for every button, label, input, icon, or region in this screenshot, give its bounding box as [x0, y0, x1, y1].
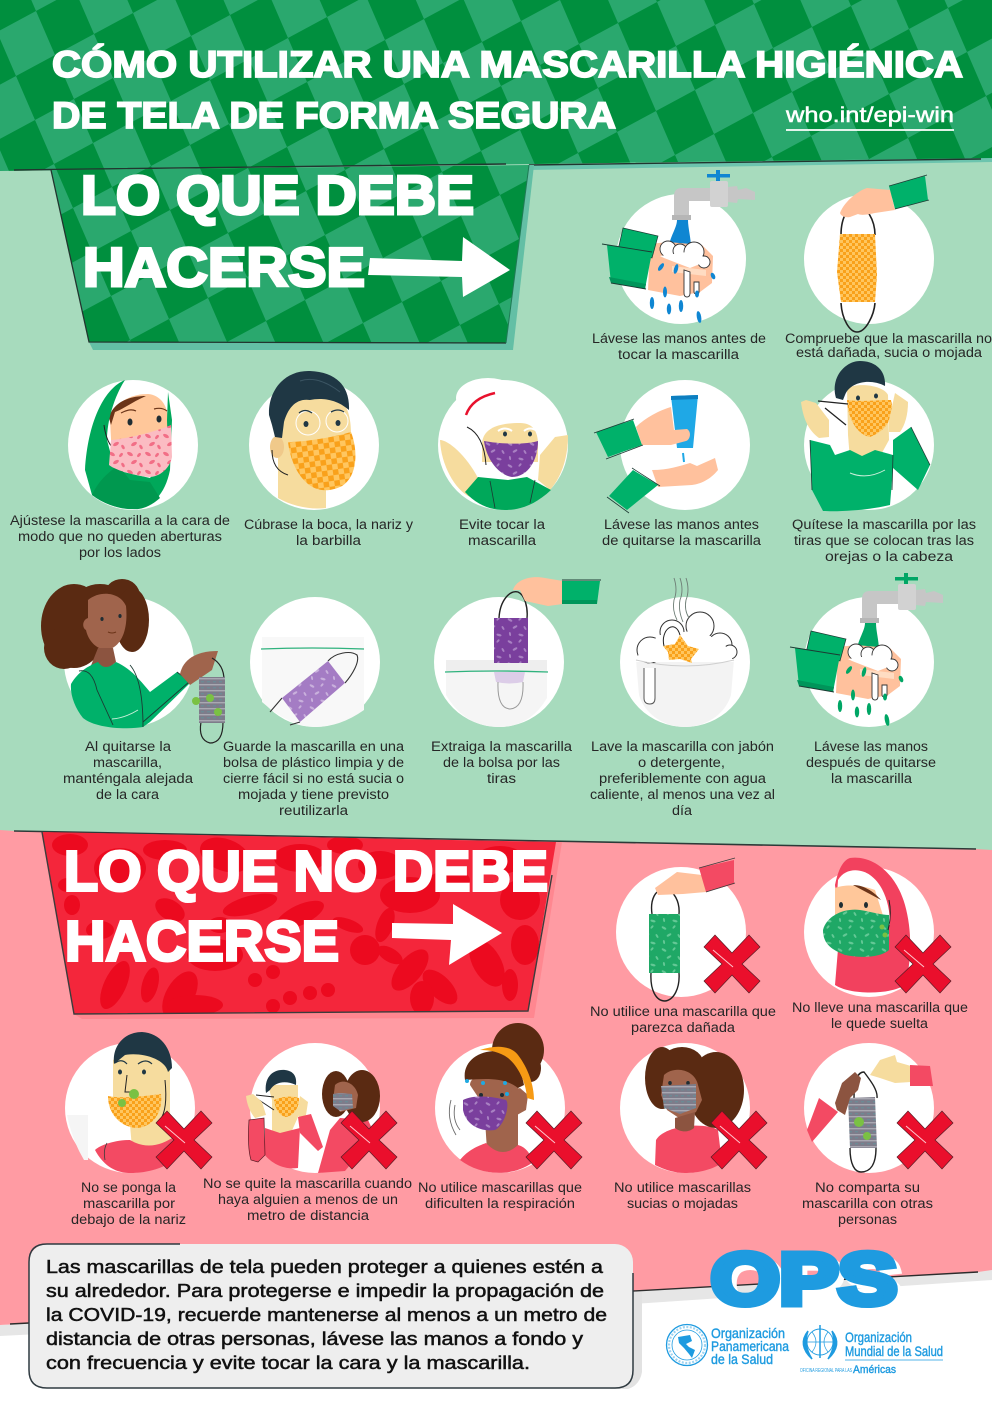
step: keep away from face [41, 579, 225, 802]
caption: de la cara [96, 787, 160, 802]
step: take from bag [431, 577, 601, 786]
callout: advice box: distancia de otras personas, lávese las manos a fondo y [46, 1329, 583, 1349]
caption: No comparta su [815, 1180, 920, 1195]
heading text: HACERSE [65, 910, 339, 974]
caption: personas [838, 1212, 897, 1227]
caption: parezca dañada [631, 1020, 736, 1035]
caption: mojada y tiene previsto [238, 787, 389, 802]
caption [223, 739, 405, 818]
icon: red cross [156, 1111, 212, 1169]
callout: advice box [29, 1244, 642, 1389]
caption: No utilice mascarillas [614, 1180, 751, 1195]
caption: metro de distancia [247, 1208, 370, 1223]
icon: mask in bowl with soap [636, 578, 737, 727]
caption [244, 517, 413, 548]
caption: modo que no queden aberturas [18, 529, 222, 544]
do not: remove near others [203, 1043, 412, 1223]
icon: red cross [704, 935, 760, 993]
heading panel: lo que no debe hacerse [40, 830, 562, 1025]
do not: share mask [802, 1043, 953, 1227]
caption: No se quite la mascarilla cuando [203, 1176, 412, 1191]
caption: No utilice una mascarilla que [590, 1004, 776, 1019]
caption: Cúbrase la boca, la nariz y [244, 517, 413, 532]
caption: caliente, al menos una vez al [590, 787, 775, 802]
logo text: Organización Mundial de la Salud, Américas: Organización [845, 1329, 912, 1345]
icon: man removing mask beside woman [246, 1070, 380, 1173]
caption: debajo de la nariz [71, 1212, 186, 1227]
caption: dificulten la respiración [425, 1196, 575, 1211]
icon: woman with loose mask [823, 858, 910, 992]
caption: tiras [487, 771, 516, 786]
heading text: LO QUE DEBE [81, 164, 474, 226]
heading text [81, 164, 474, 298]
pink section shadow [0, 1270, 992, 1336]
icon: washing hands, green water [790, 573, 943, 726]
do not: loose mask [792, 858, 968, 1031]
icon: red cross [897, 1111, 953, 1169]
panel: what to do background [0, 155, 992, 850]
logo text: Organización Panamericana de la Salud: de la Salud [711, 1351, 773, 1367]
callout: advice box: su alrededor. Para protegerse e impedir la propagación de [46, 1281, 604, 1301]
arrow [392, 904, 502, 965]
caption: No utilice mascarillas que [418, 1180, 582, 1195]
caption: mascarilla por [83, 1196, 176, 1211]
pink section bottom line [10, 1272, 978, 1324]
logo: WHO emblem [803, 1325, 837, 1359]
caption: de la bolsa por las [443, 755, 560, 770]
logo text: Organización Panamericana de la Salud: Organización [711, 1325, 785, 1341]
caption: está dañada, sucia o mojada [796, 345, 983, 360]
caption [63, 739, 194, 802]
caption: No se ponga la [81, 1180, 177, 1195]
caption [71, 1180, 186, 1227]
step: adjust mask [10, 380, 230, 560]
icon: man with orange mask [269, 371, 355, 509]
logo text: Organización Mundial de la Salud, Américas: Américas [853, 1364, 896, 1376]
step: wash mask [590, 578, 775, 818]
caption: día [672, 803, 693, 818]
caption [590, 739, 775, 818]
do not: hard to breathe [418, 1023, 582, 1211]
heading panel: lo que debe hacerse [51, 164, 534, 350]
caption: orejas o la cabeza [825, 549, 954, 564]
icon: sanitizer and hands [594, 395, 718, 513]
caption [590, 1004, 776, 1035]
caption: la barbilla [296, 533, 362, 548]
caption: reutilizarla [279, 803, 349, 818]
caption: manténgala alejada [63, 771, 194, 786]
website link: who.int/epi-win [785, 104, 954, 127]
title: DE TELA DE FORMA SEGURA [52, 95, 616, 136]
title: CÓMO UTILIZAR UNA MASCARILLA HIGIÉNICA [52, 43, 963, 85]
step: check mask [785, 175, 992, 360]
icon: older woman with purple mask [440, 378, 568, 510]
caption: mascarilla, [93, 755, 162, 770]
caption [459, 517, 546, 548]
caption [802, 1180, 933, 1227]
icon: woman struggling to breathe [449, 1023, 544, 1173]
caption [592, 331, 766, 362]
logo text: Organización Mundial de la Salud, Américas: Mundial de la Salud [845, 1343, 943, 1359]
icon: washing hands [602, 170, 755, 323]
icon: red cross [895, 935, 951, 993]
caption: No lleve una mascarilla que [792, 1000, 968, 1015]
caption: Lávese las manos antes [604, 517, 759, 532]
caption: Al quitarse la [85, 739, 172, 754]
caption: preferiblemente con agua [599, 771, 767, 786]
icon: woman holding contaminated mask [41, 579, 225, 743]
caption: tocar la mascarilla [618, 347, 740, 362]
icon: woman with dirty mask [645, 1047, 744, 1173]
icon: hand pulling mask from bag [445, 577, 601, 727]
caption: Compruebe que la mascarilla no [785, 331, 992, 346]
logo text: Organización Panamericana de la Salud [711, 1325, 789, 1367]
logo: OPS: OPS [716, 1245, 902, 1325]
caption [792, 517, 976, 564]
caption: tiras que se colocan tras las [794, 533, 974, 548]
heading text [64, 840, 548, 974]
icon: sharing a contaminated mask [807, 1055, 933, 1172]
header banner [0, 0, 992, 171]
logo text: Organización Panamericana de la Salud: Panamericana [711, 1338, 789, 1354]
caption [792, 1000, 968, 1031]
caption: Quítese la mascarilla por las [792, 517, 976, 532]
callout: advice box: con frecuencia y evite tocar la cara y la mascarilla. [46, 1353, 530, 1373]
arrow [368, 237, 510, 297]
do not: below nose [65, 1032, 212, 1227]
logo: OPS: OPS [711, 1240, 897, 1320]
caption: por los lados [79, 545, 161, 560]
caption: bolsa de plástico limpia y de [223, 755, 404, 770]
panel: what not to do background [0, 826, 992, 1325]
step: avoid touching [438, 378, 568, 548]
icon: woman with hijab and pink mask [85, 380, 172, 509]
caption [431, 739, 573, 786]
step: store in bag [223, 597, 405, 818]
caption: Lávese las manos antes de [592, 331, 766, 346]
caption: haya alguien a menos de un [218, 1192, 398, 1207]
caption: Guarde la mascarilla en una [223, 739, 405, 754]
caption: mascarilla [468, 533, 537, 548]
caption: de quitarse la mascarilla [602, 533, 762, 548]
icon: hand holding damaged mask [649, 858, 735, 1001]
heading text: HACERSE [83, 236, 365, 298]
icon: red cross [711, 1111, 767, 1169]
floral background [40, 830, 560, 1025]
icon: man with mask below nose [67, 1032, 178, 1173]
do not: damaged mask [590, 858, 776, 1035]
icon: hand holding mask [837, 175, 929, 332]
caption: cierre fácil si no está sucia o [223, 771, 404, 786]
caption: después de quitarse [806, 755, 936, 770]
caption [614, 1180, 751, 1211]
caption: Lávese las manos [814, 739, 928, 754]
caption [10, 513, 230, 560]
do not: dirty or wet [614, 1043, 767, 1211]
section divider line [14, 831, 976, 849]
title [52, 43, 963, 136]
step: wash hands after [790, 573, 943, 786]
caption: Ajústese la mascarilla a la cara de [10, 513, 230, 528]
caption: Lave la mascarilla con jabón [591, 739, 774, 754]
caption: Extraiga la mascarilla [431, 739, 573, 754]
caption: la mascarilla [831, 771, 913, 786]
heading text: LO QUE NO DEBE [64, 840, 548, 904]
step: wash hands before removal [594, 380, 762, 548]
caption [806, 739, 936, 786]
logo text: Organización Mundial de la Salud, Américas [800, 1329, 943, 1376]
logo: PAHO emblem [666, 1324, 708, 1366]
caption [203, 1176, 412, 1223]
icon: red cross [341, 1111, 397, 1169]
caption: mascarilla con otras [802, 1196, 933, 1211]
icon: man removing mask [801, 361, 930, 511]
callout: advice box: la COVID-19, recuerde mantenerse al menos a un metro de [46, 1305, 607, 1325]
caption: sucias o mojadas [627, 1196, 738, 1211]
icon: mask inside plastic bag [261, 637, 364, 727]
callout: advice box: Las mascarillas de tela pueden proteger a quienes estén a [46, 1257, 604, 1277]
caption [785, 331, 992, 360]
caption: le quede suelta [831, 1016, 929, 1031]
caption [602, 517, 762, 548]
caption [418, 1180, 582, 1211]
step: wash hands before [592, 170, 766, 362]
step: remove by straps [792, 361, 976, 564]
logo text: Organización Mundial de la Salud, Américas: OFICINA REGIONAL PARA LAS [800, 1368, 852, 1374]
caption: o detergente, [638, 755, 725, 770]
icon: red cross [526, 1111, 582, 1169]
caption: Evite tocar la [459, 517, 546, 532]
step: cover mouth [244, 371, 413, 548]
